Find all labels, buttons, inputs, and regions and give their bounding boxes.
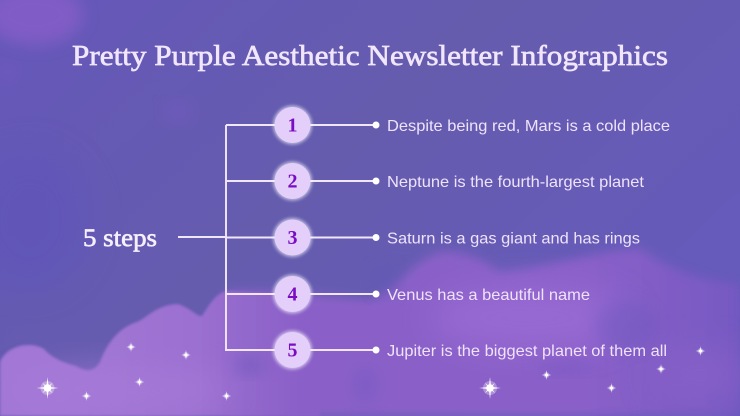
step 3: 3 — [288, 227, 298, 249]
step 1 — [226, 106, 670, 144]
bracket spine — [225, 125, 227, 350]
step 2: 2 — [288, 170, 298, 192]
step 5: Jupiter is the biggest planet of them all — [387, 343, 667, 360]
label: 5 steps: 5 steps — [83, 225, 157, 252]
connector from label to bracket — [178, 236, 226, 238]
step 4: 4 — [288, 284, 298, 306]
step 1: Despite being red, Mars is a cold place — [387, 118, 670, 135]
step 4: Venus has a beautiful name — [387, 287, 590, 304]
clouds — [0, 248, 740, 416]
stars — [36, 342, 706, 401]
step 2: Neptune is the fourth-largest planet — [387, 174, 645, 191]
step 5: 5 — [288, 340, 298, 362]
sharp left cloud — [0, 291, 320, 416]
step 3 — [226, 218, 640, 257]
step 4 — [226, 274, 590, 314]
title: Pretty Purple Aesthetic Newsletter Infographics — [72, 40, 668, 72]
step 2 — [226, 162, 645, 200]
soft right cloud mass — [226, 248, 740, 416]
step 1: 1 — [288, 114, 298, 136]
step 3: Saturn is a gas giant and has rings — [387, 230, 640, 248]
step 5 — [225, 330, 667, 370]
